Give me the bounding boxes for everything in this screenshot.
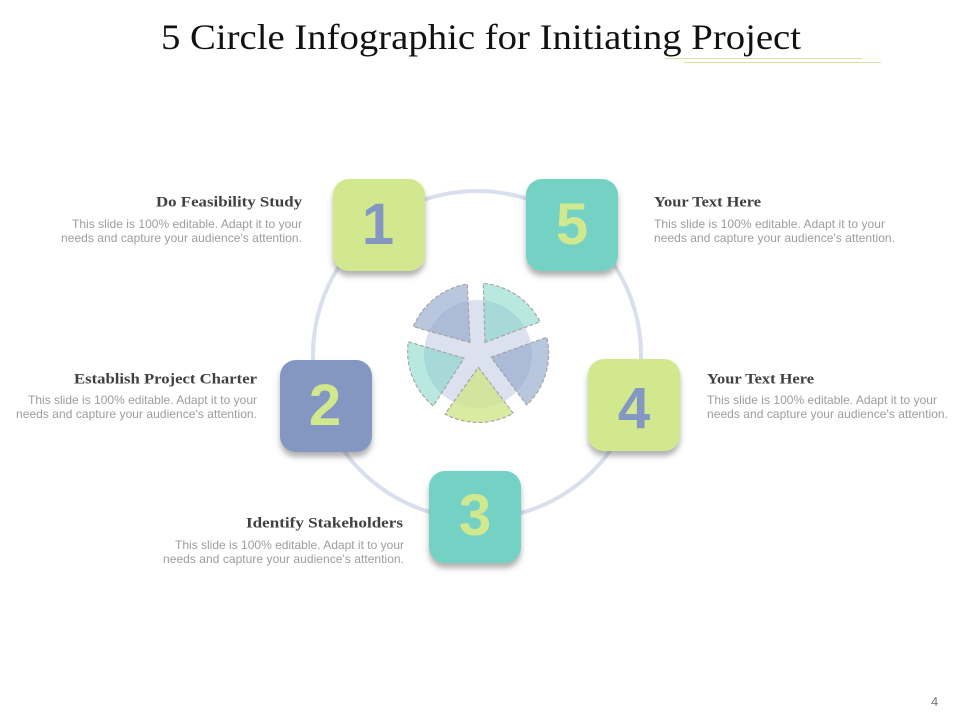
sector: top right — [483, 283, 540, 342]
step 2 tile — [280, 360, 372, 452]
step 3 tile — [429, 471, 521, 563]
title: 5 Circle Infographic for Initiating Project — [161, 17, 801, 57]
text block 2: Establish Project Charter — [74, 372, 258, 388]
step 4 tile — [588, 359, 680, 451]
step 3 tile: 3 — [459, 483, 491, 548]
title underline — [665, 58, 881, 62]
sector: top left — [413, 284, 470, 342]
text block 2 — [16, 372, 258, 421]
step 5 tile: 5 — [556, 192, 588, 257]
text block 5: needs and capture your audience's attention. — [654, 231, 895, 245]
text block 3: This slide is 100% editable. Adapt it to your — [175, 538, 404, 552]
sector: left — [408, 342, 464, 406]
text block 1: needs and capture your audience's attention. — [61, 231, 302, 245]
central pie diagram — [408, 283, 549, 422]
text block 5: This slide is 100% editable. Adapt it to your — [654, 217, 885, 231]
inner circle — [424, 300, 532, 408]
text block 3 — [163, 516, 404, 566]
text block 4: needs and capture your audience's attention. — [707, 407, 948, 421]
step 2 tile: 2 — [309, 373, 341, 438]
text block 4 — [707, 372, 948, 421]
text block 5: Your Text Here — [654, 194, 762, 210]
step 1 tile — [333, 179, 425, 271]
text block 4: This slide is 100% editable. Adapt it to your — [707, 393, 937, 407]
text block 1: This slide is 100% editable. Adapt it to your — [72, 217, 302, 231]
text block 3: needs and capture your audience's attention. — [163, 552, 404, 566]
text block 1 — [61, 194, 303, 245]
page number: 4 — [931, 694, 938, 709]
text block 3: Identify Stakeholders — [246, 516, 403, 532]
text block 1: Do Feasibility Study — [156, 194, 303, 210]
text block 5 — [654, 194, 895, 245]
step 1 tile: 1 — [362, 192, 394, 257]
step 5 tile — [526, 179, 618, 271]
text block 2: This slide is 100% editable. Adapt it to your — [28, 393, 257, 407]
text block 4: Your Text Here — [707, 372, 815, 388]
text block 2: needs and capture your audience's attention. — [16, 407, 257, 421]
sector: bottom — [445, 367, 513, 422]
sector: right — [491, 337, 549, 405]
step 4 tile: 4 — [618, 376, 650, 441]
connecting ring — [313, 191, 641, 519]
